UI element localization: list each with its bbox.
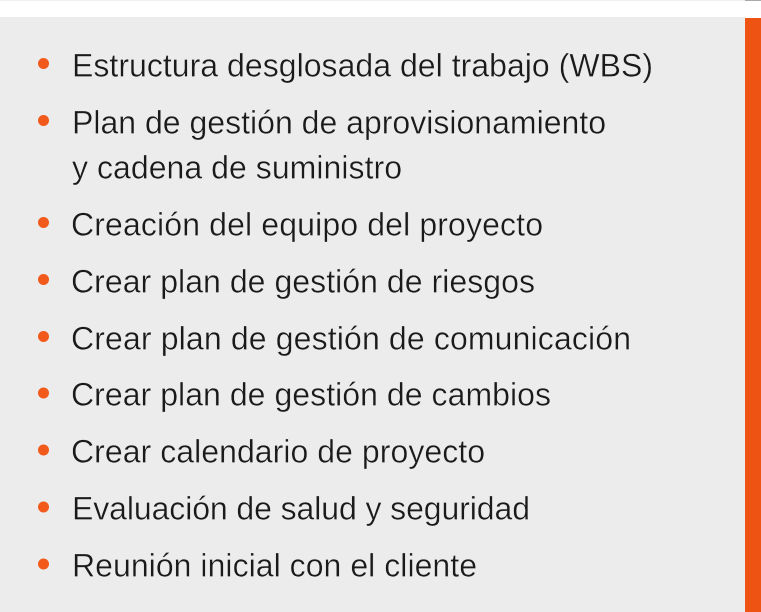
item: Estructura desglosada: Estructura desglosada del trabajo (WBS) bbox=[72, 48, 653, 84]
item: reunión inicial: Reunión inicial con el cliente bbox=[72, 548, 477, 584]
item: plan de riesgos: Crear plan de gestión de riesgos bbox=[71, 264, 535, 300]
item: salud y seguridad: Evaluación de salud y seguridad bbox=[72, 490, 530, 526]
item: Plan de gestión de aprovisionamiento bbox=[38, 104, 606, 186]
item: calendario: Crear calendario de proyecto bbox=[71, 434, 485, 470]
item: plan de comunicación: Crear plan de gestión de comunicación bbox=[71, 320, 631, 356]
item: plan de cambios: Crear plan de gestión de cambios bbox=[71, 376, 551, 412]
item: Plan de gestión de aprovisionamiento: y cadena de suministro bbox=[72, 150, 402, 186]
accent bar bbox=[745, 18, 761, 612]
item: Creación del equipo: Creación del equipo del proyecto bbox=[71, 206, 543, 242]
item: Plan de gestión de aprovisionamiento: Plan de gestión de aprovisionamiento bbox=[72, 104, 606, 140]
